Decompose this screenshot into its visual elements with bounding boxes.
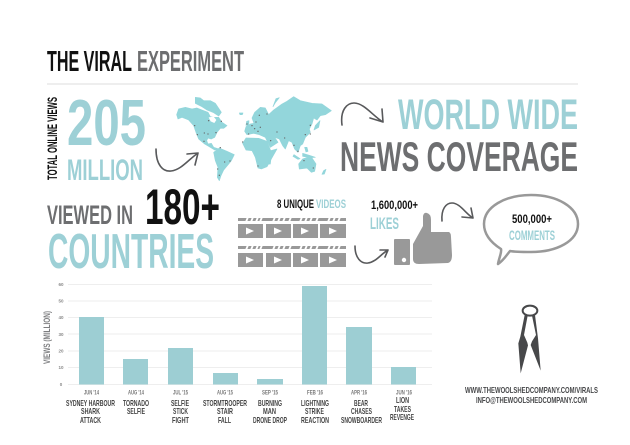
bar chart: views per video: LIGHTNING: [301, 398, 329, 408]
bar chart: views per video: SYDNEY HARBOUR: [66, 398, 115, 408]
total online views stat: [44, 86, 146, 187]
total online views stat: MILLION: [67, 154, 143, 187]
viewed in 180+ countries: [47, 179, 220, 279]
bar chart: views per video: FIGHT: [172, 415, 190, 425]
icon: thumbs up: [394, 213, 452, 265]
likes stat: LIKES: [370, 214, 399, 233]
bar chart: views per video: TAKES: [394, 404, 411, 414]
bar chart: views per video: 50: [58, 298, 64, 304]
8 unique videos heading: 8 UNIQUE: [277, 197, 314, 211]
bar chart: views per video: [42, 282, 432, 425]
bar chart: views per video: SEP '15: [262, 390, 278, 396]
total online views stat: TOTAL ONLINE VIEWS: [44, 97, 60, 180]
world map: [177, 97, 331, 181]
bar chart: views per video: 0: [60, 382, 63, 387]
bar chart: views per video: 60: [58, 282, 64, 287]
bar chart: views per video: JUL '15: [173, 390, 188, 396]
bar chart: views per video: MAN: [263, 406, 276, 416]
bar chart: views per video: SELFIE: [127, 406, 145, 416]
bar chart: views per video: AUG '14: [128, 390, 144, 396]
bar chart: views per video: 30: [58, 332, 64, 337]
total online views stat: 205: [67, 86, 146, 159]
arrow: videos to likes: [355, 246, 388, 263]
arrow: likes to comments: [442, 203, 473, 221]
bar chart: views per video: STORMTROOPER: [203, 398, 247, 408]
bar chart: views per video: SNOWBOARDER: [341, 415, 382, 425]
bar chart: views per video: 10: [58, 365, 64, 370]
bar chart: views per video: LION: [396, 395, 409, 405]
bar chart: views per video: VIEWS (MILLION): [42, 311, 52, 364]
bar chart: views per video: REVENGE: [390, 412, 414, 422]
bar chart: views per video: CHASES: [351, 406, 372, 416]
arrow: map to news coverage: [342, 103, 383, 125]
bar chart: views per video: 40: [58, 315, 64, 320]
icon: wool shears: [518, 306, 541, 373]
bar chart: views per video: STICK: [173, 406, 188, 416]
bar chart: views per video: JUN '16: [396, 390, 412, 396]
viewed in 180+ countries: VIEWED IN: [47, 200, 133, 230]
bar chart: views per video: STRIKE: [305, 406, 324, 416]
bar chart: views per video: APR '16: [351, 390, 367, 396]
bar chart: views per video: TORNADO: [123, 398, 149, 408]
bar chart: views per video: ATTACK: [80, 415, 101, 425]
bar chart: views per video: FALL: [218, 415, 231, 425]
contact details: INFO@THEWOOLSHEDCOMPANY.COM: [476, 395, 587, 405]
bar chart: views per video: FEB '16: [307, 390, 323, 396]
speech bubble: comments: COMMENTS: [509, 227, 555, 243]
8 unique videos heading: VIDEOS: [316, 197, 346, 211]
film strips: [238, 217, 346, 267]
bar chart: views per video: BEAR: [354, 398, 368, 408]
speech bubble: comments: 500,000+: [512, 212, 552, 226]
likes stat: 1,600,000+: [371, 198, 418, 212]
contact details: [465, 385, 598, 405]
likes stat: [370, 198, 418, 233]
viewed in 180+ countries: COUNTRIES: [48, 225, 214, 279]
title: EXPERIMENT: [137, 46, 244, 78]
bar chart: views per video: JUN '14: [84, 390, 99, 396]
bar chart: views per video: AUG '15: [217, 390, 233, 396]
bar chart: views per video: STAIR: [217, 406, 233, 416]
viewed in 180+ countries: 180+: [145, 179, 220, 235]
bar chart: views per video: BURNING: [258, 398, 282, 408]
bar chart: views per video: 20: [58, 348, 64, 354]
arrow: million to map: [156, 149, 198, 171]
bar chart: views per video: DRONE DROP: [253, 415, 287, 425]
title: THE VIRAL: [47, 46, 132, 78]
world wide news coverage: [340, 91, 578, 180]
bar chart: views per video: SELFIE: [171, 398, 189, 408]
speech bubble: comments: [484, 195, 578, 264]
bar chart: views per video: SHARK: [81, 406, 100, 416]
bar chart: views per video: REACTION: [301, 415, 329, 425]
